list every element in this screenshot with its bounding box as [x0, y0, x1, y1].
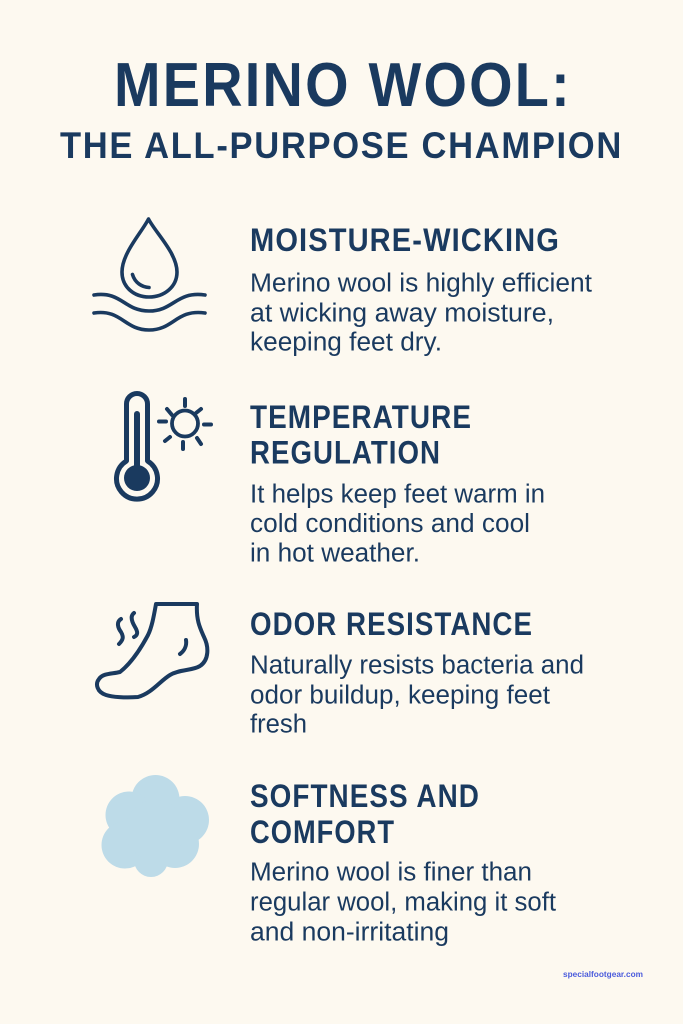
text block: Naturally resists bacteria and: [250, 652, 584, 680]
panel: moisture-wicking: [94, 219, 592, 356]
heading: REGULATION: [250, 434, 441, 470]
text block: Merino wool is finer than: [250, 858, 532, 886]
footer url: specialfootgear.com: [563, 969, 643, 979]
text block: It helps keep feet warm in: [250, 480, 545, 508]
text block: cold conditions and cool: [250, 510, 530, 538]
title: MERINO WOOL:: [114, 51, 572, 120]
heading: [250, 778, 480, 850]
heading: SOFTNESS AND: [250, 778, 480, 814]
text block: in hot weather.: [250, 540, 420, 568]
text block: fresh: [250, 710, 307, 738]
text block: [250, 858, 556, 946]
icon: soft cloud: [102, 775, 209, 877]
text block: regular wool, making it soft: [250, 888, 556, 916]
text block: [250, 270, 592, 356]
title: [60, 51, 623, 166]
heading: TEMPERATURE: [250, 399, 472, 435]
icon: foot with odor lines: [97, 604, 207, 697]
heading: MOISTURE-WICKING: [250, 222, 560, 258]
title: THE ALL-PURPOSE CHAMPION: [60, 125, 623, 166]
heading: COMFORT: [250, 814, 395, 850]
panel: odor resistance: [97, 604, 584, 738]
icon: thermometer and sun: [116, 394, 211, 499]
text block: at wicking away moisture,: [250, 300, 554, 328]
panel: temperature regulation: [116, 394, 545, 568]
text block: and non-irritating: [250, 918, 449, 946]
heading: [250, 399, 472, 470]
icon: water drop over waves: [94, 219, 205, 330]
text block: [250, 480, 545, 568]
text block: keeping feet dry.: [250, 328, 442, 356]
text block: Merino wool is highly efficient: [250, 270, 592, 298]
panel: softness and comfort: [102, 775, 556, 946]
heading: ODOR RESISTANCE: [250, 606, 533, 642]
text block: [250, 652, 584, 738]
text block: odor buildup, keeping feet: [250, 682, 550, 710]
